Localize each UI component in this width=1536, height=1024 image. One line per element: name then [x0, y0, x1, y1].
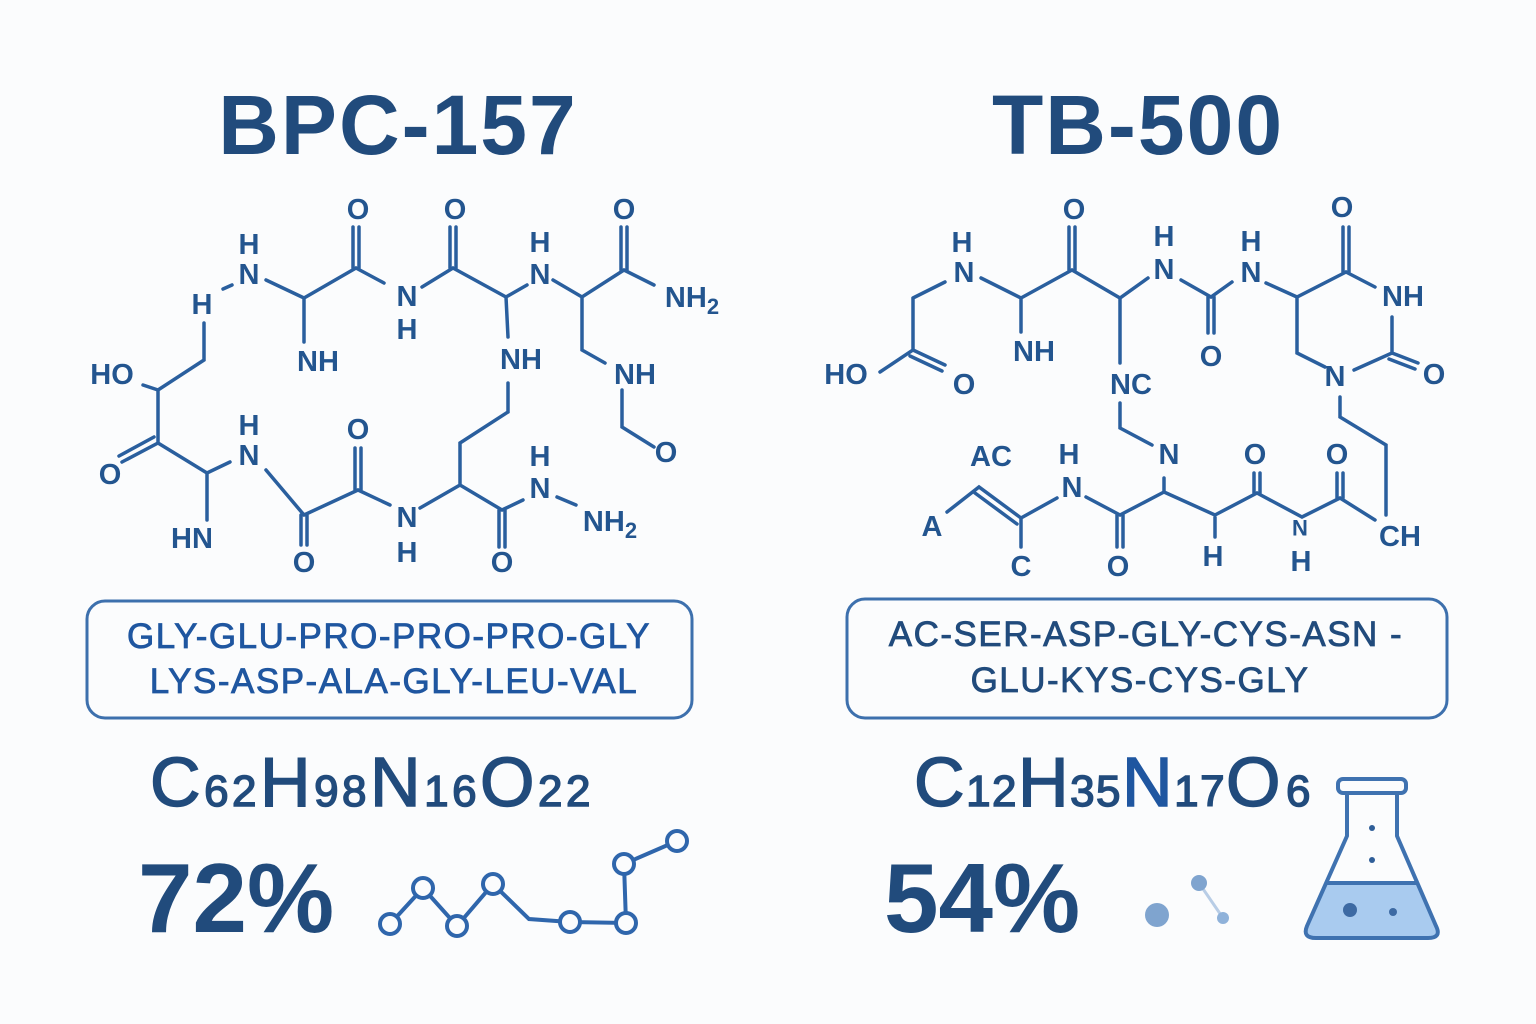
text: H	[397, 314, 417, 346]
stat: 72%: 72%	[138, 843, 334, 953]
text: HO	[90, 359, 134, 391]
text: HN	[171, 523, 213, 555]
sequence box: TB-500: AC-SER-ASP-GLY-CYS-ASN -	[889, 615, 1403, 654]
formula: BPC-157: C62H98N16O22	[150, 743, 594, 821]
icon: molecule dots	[1145, 875, 1229, 927]
text: H	[1059, 439, 1079, 471]
text: O	[293, 547, 315, 579]
title: TB-500: TB-500	[992, 78, 1284, 172]
text: O	[1331, 192, 1353, 224]
sequence box: BPC-157: LYS-ASP-ALA-GLY-LEU-VAL	[150, 662, 638, 701]
stat: 54%: 54%	[884, 843, 1080, 953]
sequence box: BPC-157	[87, 601, 692, 718]
text: H	[397, 537, 417, 569]
text: NH	[1013, 336, 1055, 368]
text: N	[239, 440, 259, 472]
sequence box: BPC-157: GLY-GLU-PRO-PRO-PRO-GLY	[127, 617, 651, 656]
text: H	[1291, 546, 1311, 578]
sequence box: TB-500	[847, 599, 1447, 718]
text: N	[530, 259, 550, 291]
text: NH	[297, 346, 339, 378]
text: A	[922, 511, 943, 543]
text: O	[1063, 194, 1085, 226]
text: O	[1326, 439, 1348, 471]
text: O	[613, 194, 635, 226]
text: H	[1241, 226, 1261, 258]
text: O	[99, 459, 121, 491]
icon: flask	[1306, 779, 1438, 938]
text: N	[954, 257, 974, 289]
text: O	[444, 194, 466, 226]
text: H	[239, 229, 259, 261]
structure: BPC-157	[119, 227, 654, 547]
text: 2	[707, 294, 719, 318]
text: NH	[665, 282, 707, 314]
text: O	[1200, 341, 1222, 373]
text: O	[347, 414, 369, 446]
text: O	[1244, 439, 1266, 471]
text: N	[530, 473, 550, 505]
text: 2	[625, 518, 637, 542]
text: N	[1154, 254, 1174, 286]
title: BPC-157: BPC-157	[218, 78, 578, 172]
text: NC	[1110, 369, 1152, 401]
text: C	[1011, 551, 1032, 583]
text: HO	[824, 359, 868, 391]
text: N	[1062, 472, 1082, 504]
text: H	[1154, 221, 1174, 253]
text: H	[530, 441, 550, 473]
text: O	[1107, 551, 1129, 583]
text: O	[953, 369, 975, 401]
text: O	[655, 437, 677, 469]
text: NH	[1382, 281, 1424, 313]
text: NH	[614, 359, 656, 391]
text: H	[530, 227, 550, 259]
text: H	[1203, 541, 1223, 573]
structure: TB-500	[880, 227, 1418, 547]
text: H	[239, 410, 259, 442]
text: CH	[1379, 521, 1421, 553]
text: NH	[500, 344, 542, 376]
text: N	[1325, 361, 1345, 393]
text: N	[1241, 257, 1261, 289]
sequence box: TB-500: GLU-KYS-CYS-GLY	[971, 661, 1309, 700]
text: N	[239, 259, 259, 291]
text: O	[347, 194, 369, 226]
text: N	[1159, 439, 1179, 471]
text: H	[192, 289, 212, 321]
text: O	[491, 547, 513, 579]
formula: TB-500: C12H35N17O6	[914, 743, 1312, 821]
text: AC	[970, 441, 1012, 473]
text: H	[952, 227, 972, 259]
text: NH	[583, 506, 625, 538]
text: O	[1423, 359, 1445, 391]
text: N	[397, 281, 417, 313]
text: N	[397, 502, 417, 534]
icon: line chart	[380, 831, 687, 936]
text: N	[1292, 516, 1308, 540]
